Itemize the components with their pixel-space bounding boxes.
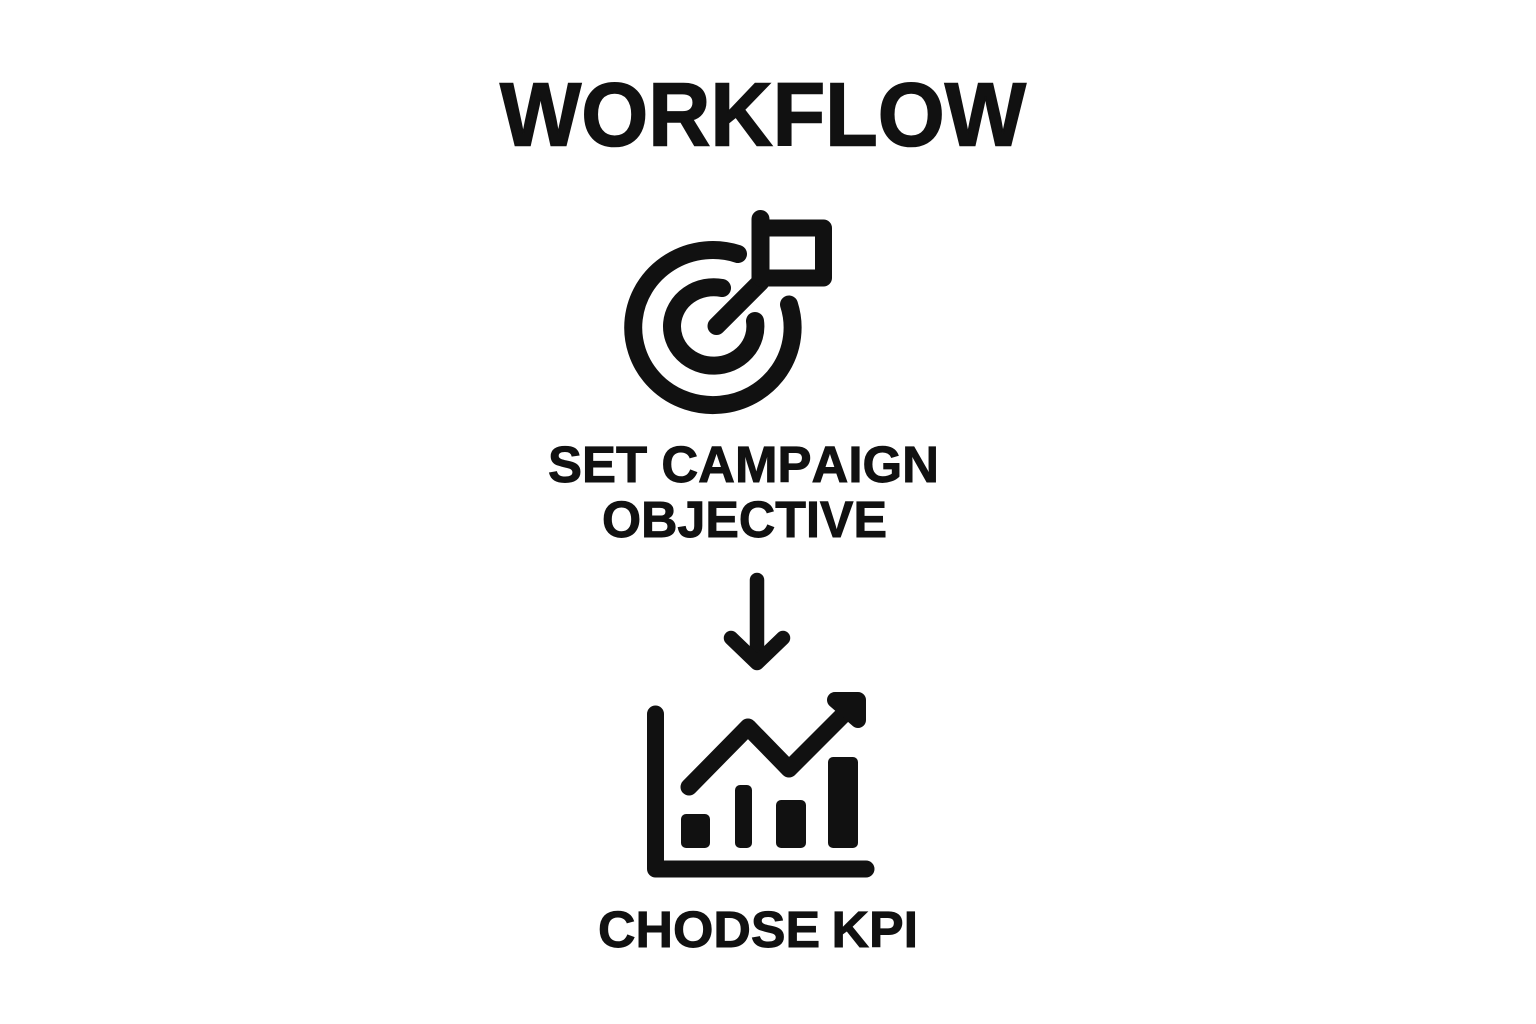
step label: set campaign objective: SET CAMPAIGN	[548, 436, 939, 493]
chart axes	[656, 714, 866, 869]
arrow: down	[731, 580, 783, 663]
step label: set campaign objective: OBJECTIVE	[602, 491, 887, 548]
icon: target with flag	[633, 219, 824, 405]
step label: chodse kpi: CHODSE KPI	[598, 901, 918, 958]
trend line with arrowhead	[689, 700, 858, 787]
icon: growth chart	[656, 700, 866, 869]
step label: set campaign objective	[548, 436, 939, 548]
chart bars	[681, 757, 858, 848]
title: WORKFLOW	[500, 66, 1026, 166]
